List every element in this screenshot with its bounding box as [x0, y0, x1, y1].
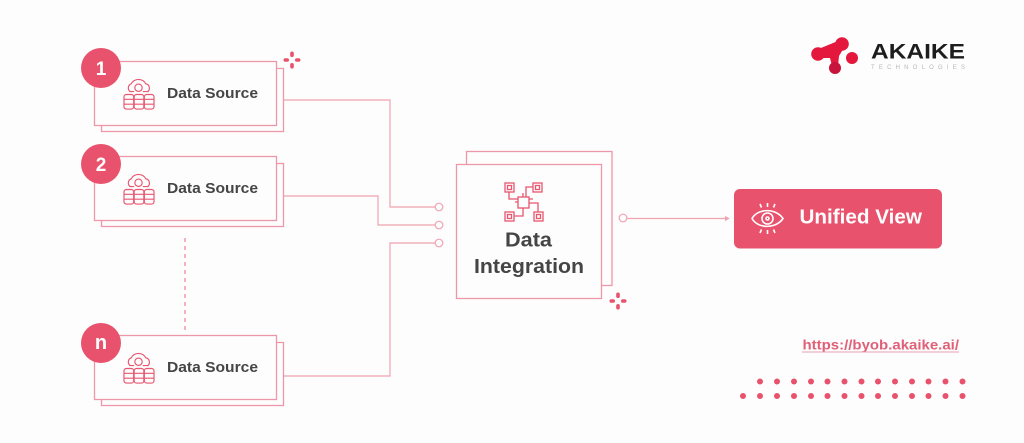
panel: data integration [456, 152, 612, 298]
connector: source 2 to integration [283, 196, 443, 229]
label: unified view: Unified View [800, 206, 922, 228]
panel: data source n [81, 323, 284, 406]
icon: sparkle bottom [610, 292, 626, 310]
connector: source 1 to integration [283, 100, 443, 211]
arrow: integration to unified view [619, 214, 728, 222]
dashed connector between source 2 and n [184, 238, 186, 331]
panel: data source 2 [81, 144, 284, 226]
panel: unified view [734, 189, 942, 248]
tagline: TECHNOLOGIES [871, 65, 965, 71]
logo mark [811, 37, 858, 74]
panel: data source 1 [81, 48, 284, 132]
wordmark: AKAIKE [871, 40, 965, 64]
label: data integration: Data [505, 230, 553, 252]
icon: cloud database [124, 353, 154, 383]
badge: n [81, 323, 121, 363]
label: data source n: Data Source [167, 360, 258, 376]
badge: 1: 1 [96, 59, 107, 80]
connector: source n to integration [283, 239, 443, 376]
icon: sparkle top [284, 52, 300, 68]
label: data source 2: Data Source [167, 181, 258, 197]
panel: data integration: Integration [474, 256, 584, 278]
decorative dot grid [740, 378, 966, 399]
icon: cloud database [124, 174, 154, 204]
icon: cloud database [124, 79, 154, 109]
icon: eye [752, 203, 783, 234]
icon: chip network [505, 183, 543, 221]
logo: akaike technologies [811, 37, 965, 74]
badge: n: n [95, 332, 107, 354]
badge: 2: 2 [96, 155, 106, 176]
badge: 1 [81, 48, 121, 88]
badge: 2 [81, 144, 121, 184]
label: data source 1: Data Source [167, 86, 258, 102]
link: url: https://byob.akaike.ai/ [802, 338, 959, 352]
